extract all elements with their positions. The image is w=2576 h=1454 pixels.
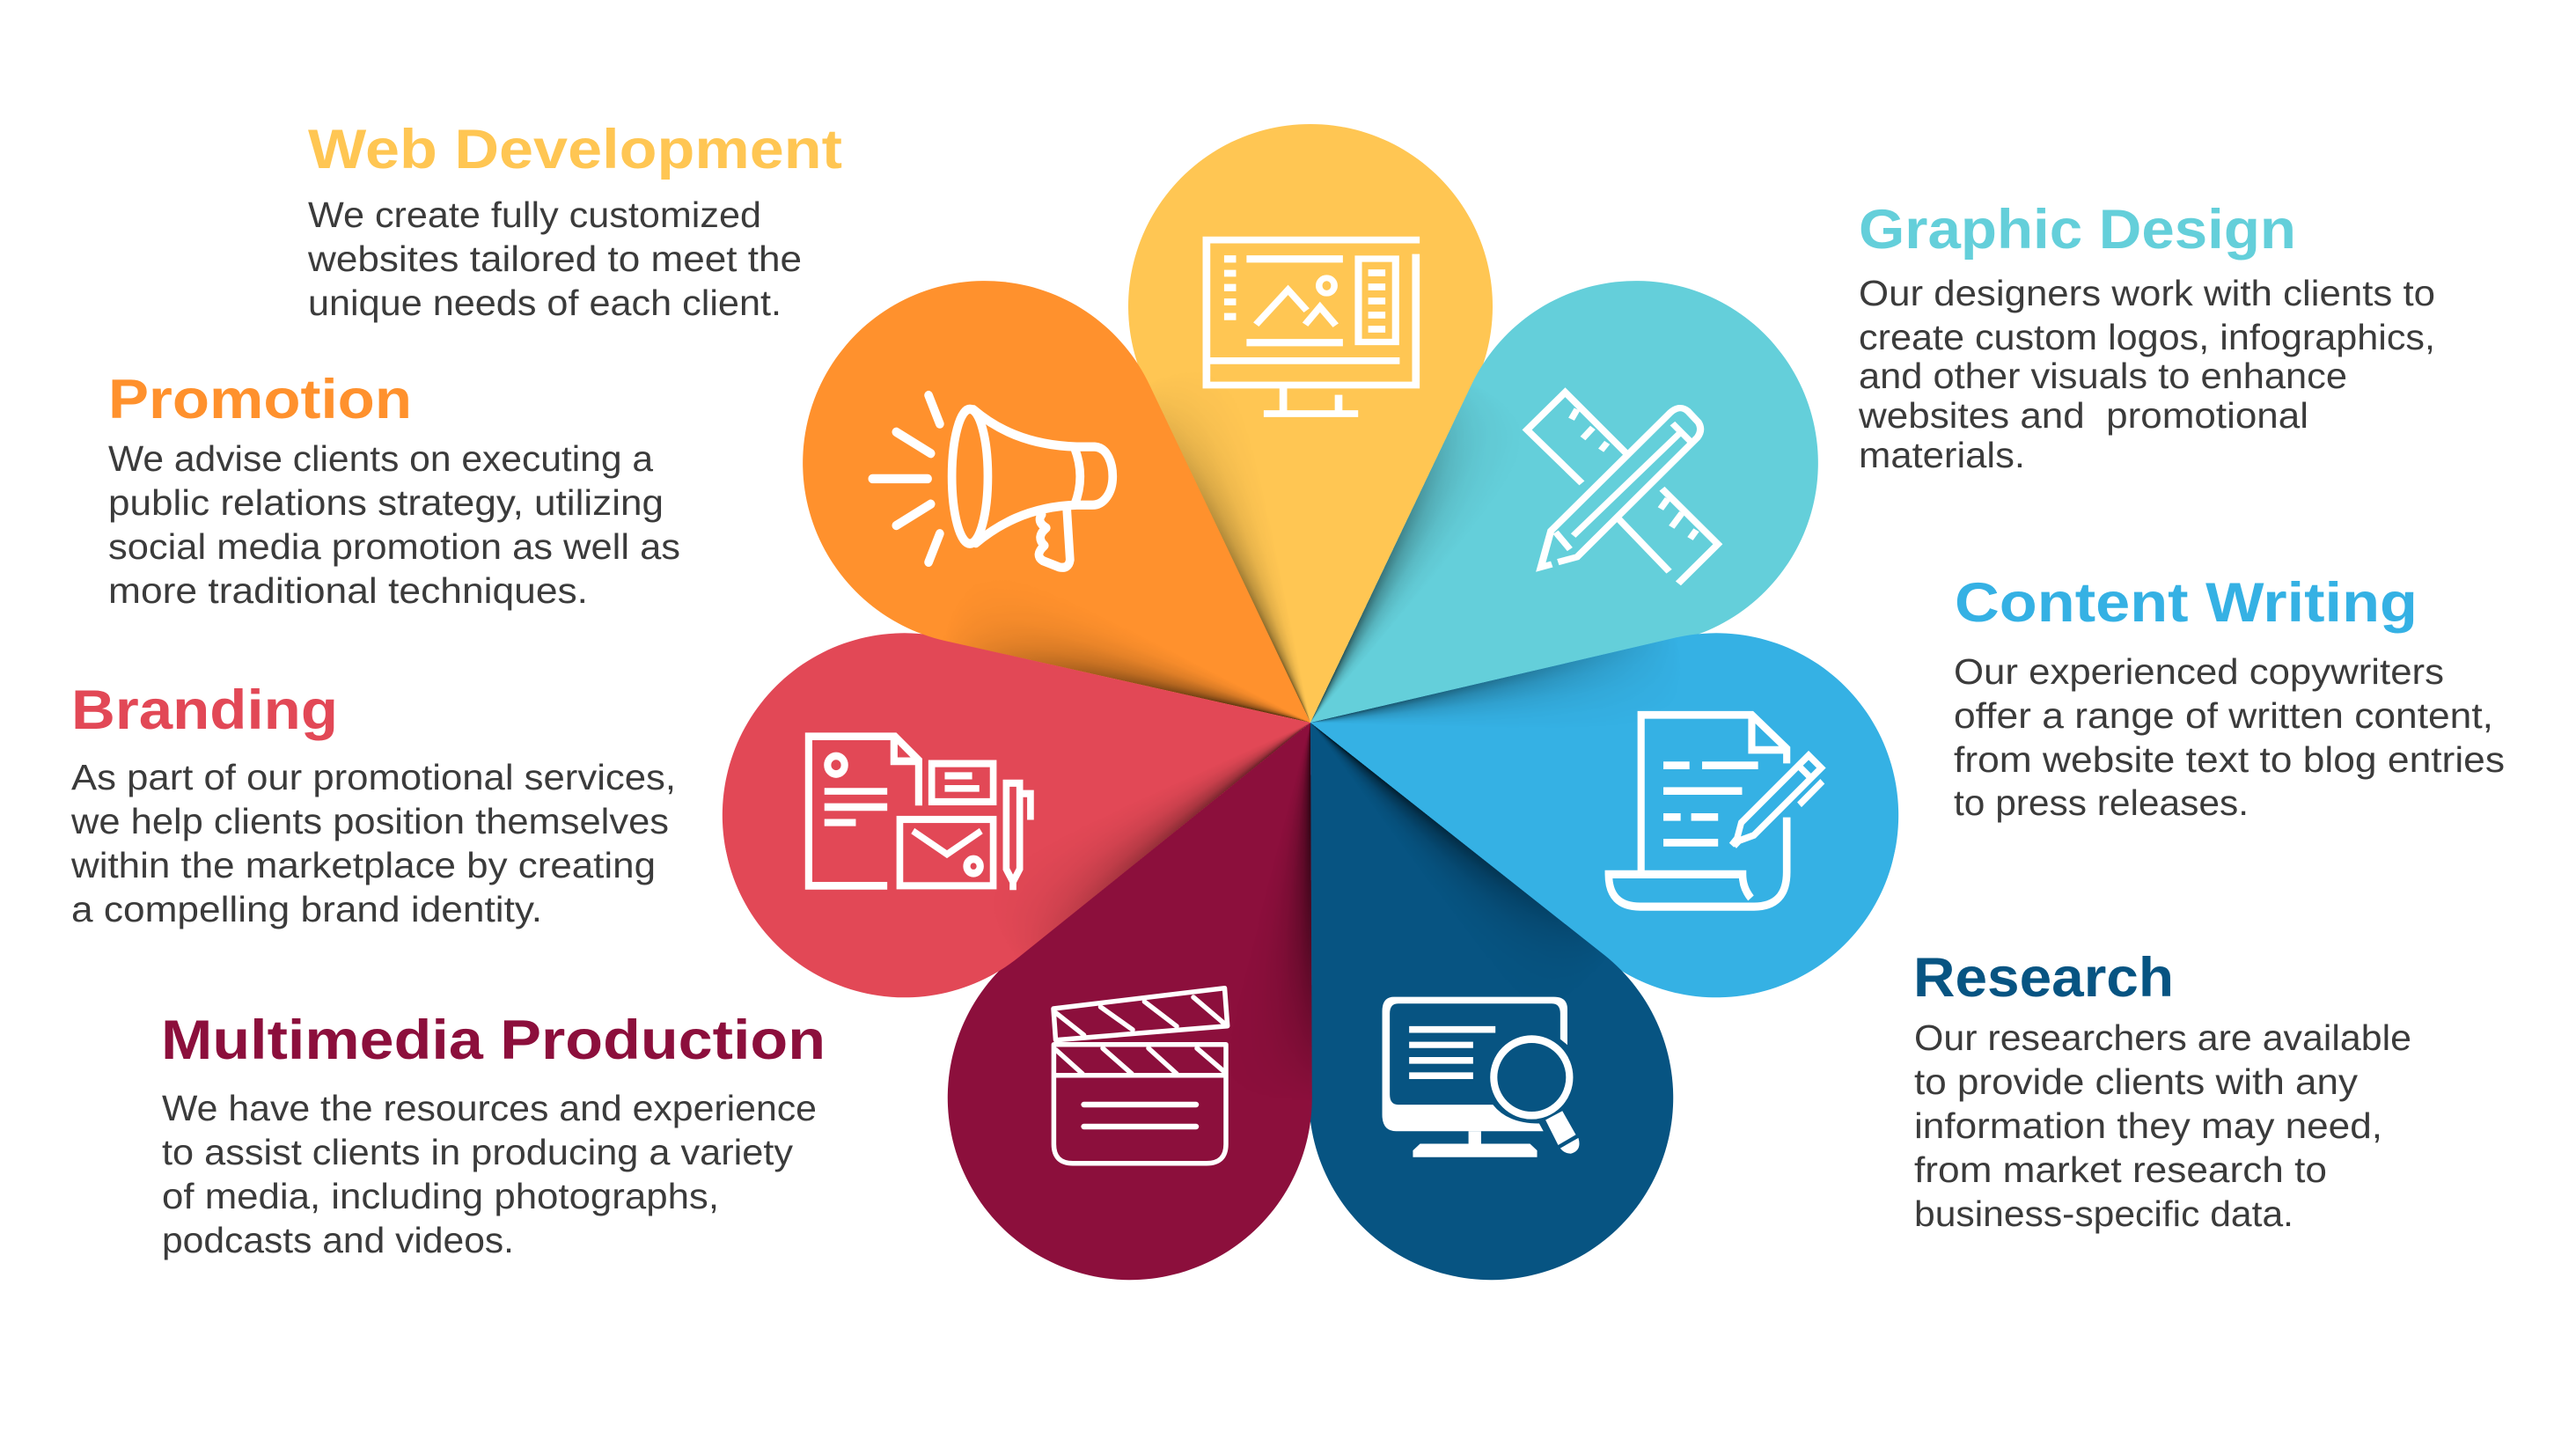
text block: branding	[70, 679, 676, 929]
body: research: business-specific data.	[1914, 1193, 2293, 1234]
petal: web development (yellow)	[1128, 124, 1493, 723]
heading: research: Research	[1913, 947, 2174, 1009]
body: promotion: We advise clients on executing a	[108, 438, 653, 479]
body: branding: within the marketplace by creating	[70, 845, 656, 885]
body: graphic design: materials.	[1859, 435, 2025, 475]
petal: promotion (orange)	[803, 281, 1310, 723]
body: graphic design: websites and promotional	[1858, 395, 2308, 436]
body: research: Our researchers are available	[1914, 1017, 2411, 1058]
body: branding	[70, 757, 676, 929]
petal: content writing (light blue)	[1310, 633, 1899, 998]
text block: multimedia production	[161, 1010, 826, 1260]
heading: branding: Branding	[71, 679, 338, 741]
icon: monitor and magnifier	[1383, 997, 1579, 1157]
body: promotion: more traditional techniques.	[108, 570, 588, 611]
body: branding: we help clients position themselves	[70, 801, 669, 841]
text block: research	[1913, 947, 2411, 1234]
body: content writing: Our experienced copywriters	[1954, 651, 2444, 692]
body: graphic design: and other visuals to enhance	[1859, 356, 2347, 396]
petal: branding (red)	[722, 633, 1310, 998]
body: research: from market research to	[1914, 1149, 2327, 1190]
text block: graphic design	[1858, 199, 2435, 475]
text block: content writing	[1954, 572, 2505, 823]
heading: graphic design: Graphic Design	[1859, 199, 2296, 261]
body: graphic design: create custom logos, infographics,	[1859, 317, 2435, 357]
body: branding: a compelling brand identity.	[71, 889, 542, 929]
body: graphic design	[1858, 273, 2435, 475]
icon: branding stationery	[809, 737, 1031, 890]
heading: web development: Web Development	[308, 119, 842, 180]
icon: web design monitor	[1207, 240, 1420, 414]
body: multimedia production: We have the resources and experience	[162, 1088, 817, 1128]
body: content writing: to press releases.	[1954, 782, 2249, 823]
icon: ruler and pencil	[1527, 393, 1718, 584]
body: promotion: social media promotion as well as	[108, 526, 680, 567]
flower diagram	[722, 124, 1899, 1280]
body: research: information they may need,	[1914, 1105, 2382, 1146]
body: content writing	[1954, 651, 2505, 823]
icon: film clapperboard	[1053, 988, 1228, 1164]
body: content writing: from website text to blog entries	[1954, 739, 2505, 780]
body: graphic design: Our designers work with clients to	[1859, 273, 2435, 313]
petal: graphic design (teal)	[1310, 281, 1818, 723]
body: branding: As part of our promotional services,	[71, 757, 676, 797]
body: web development: websites tailored to meet the	[307, 239, 802, 279]
body: promotion	[108, 438, 680, 611]
petal: research (navy)	[1310, 723, 1674, 1280]
text block: web development	[307, 119, 842, 323]
body: multimedia production: podcasts and videos.	[162, 1220, 514, 1260]
heading: content writing: Content Writing	[1955, 572, 2418, 634]
body: multimedia production: to assist clients in producing a variety	[162, 1132, 794, 1172]
body: content writing: offer a range of written content,	[1954, 695, 2493, 736]
heading: multimedia production: Multimedia Production	[161, 1010, 826, 1071]
body: multimedia production: of media, including photographs,	[162, 1176, 719, 1216]
body: research: to provide clients with any	[1914, 1061, 2359, 1102]
body: web development: unique needs of each client.	[308, 283, 782, 323]
body: web development: We create fully customized	[308, 195, 761, 235]
icon: megaphone	[872, 395, 1112, 568]
body: web development	[307, 195, 802, 323]
petal: multimedia production (maroon)	[947, 723, 1312, 1280]
body: promotion: public relations strategy, utilizing	[108, 482, 664, 523]
icon: document and pen	[1609, 715, 1823, 907]
heading: promotion: Promotion	[108, 369, 412, 430]
body: multimedia production	[162, 1088, 817, 1260]
body: research	[1914, 1017, 2411, 1234]
text block: promotion	[108, 369, 680, 611]
